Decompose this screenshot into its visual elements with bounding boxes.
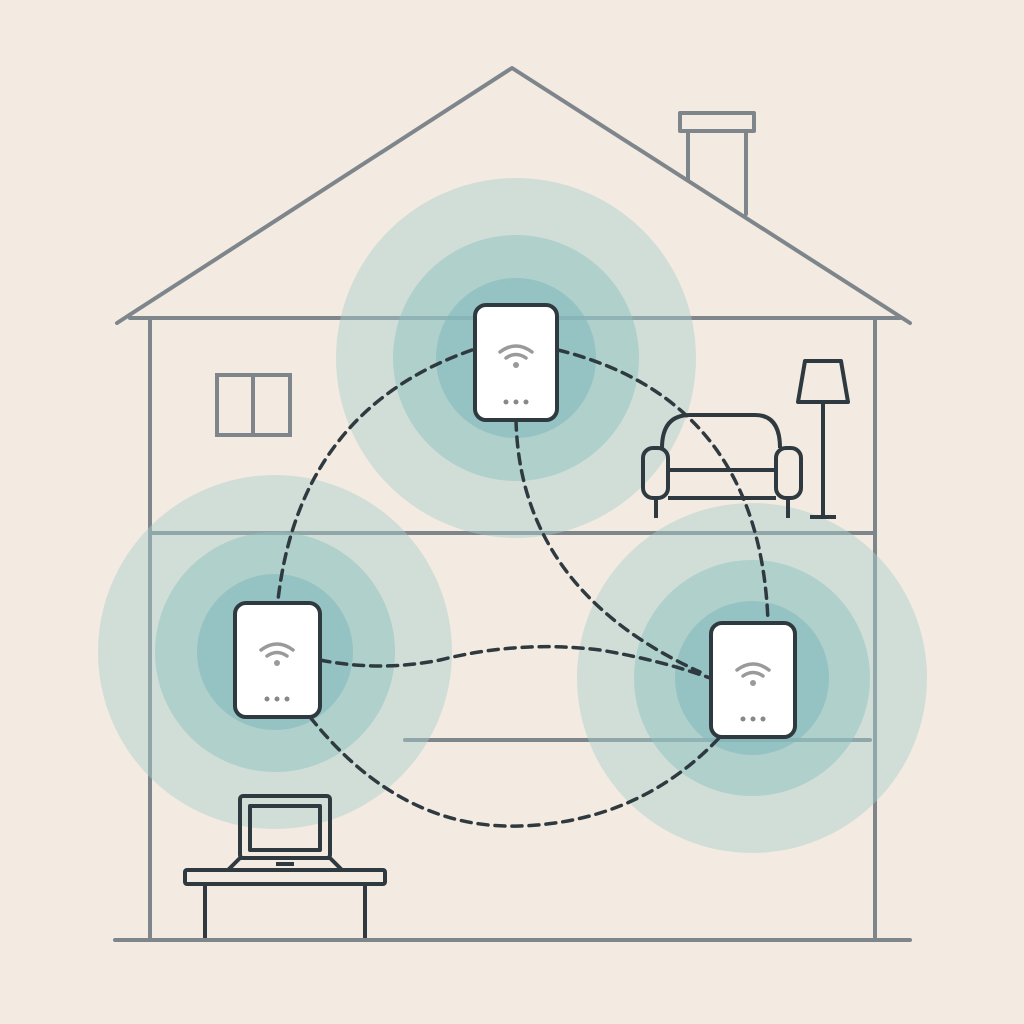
dashed mesh links — [278, 350, 768, 826]
lamp — [798, 361, 848, 517]
signal circles: top — [336, 178, 696, 538]
signal circles: left — [98, 475, 452, 829]
signal circles: right — [577, 503, 927, 853]
device: right — [711, 623, 795, 737]
window — [217, 375, 290, 435]
device: top — [475, 305, 557, 420]
house outline — [115, 68, 910, 940]
device: left — [235, 603, 320, 717]
sofa — [643, 415, 801, 518]
laptop and table — [185, 796, 385, 938]
